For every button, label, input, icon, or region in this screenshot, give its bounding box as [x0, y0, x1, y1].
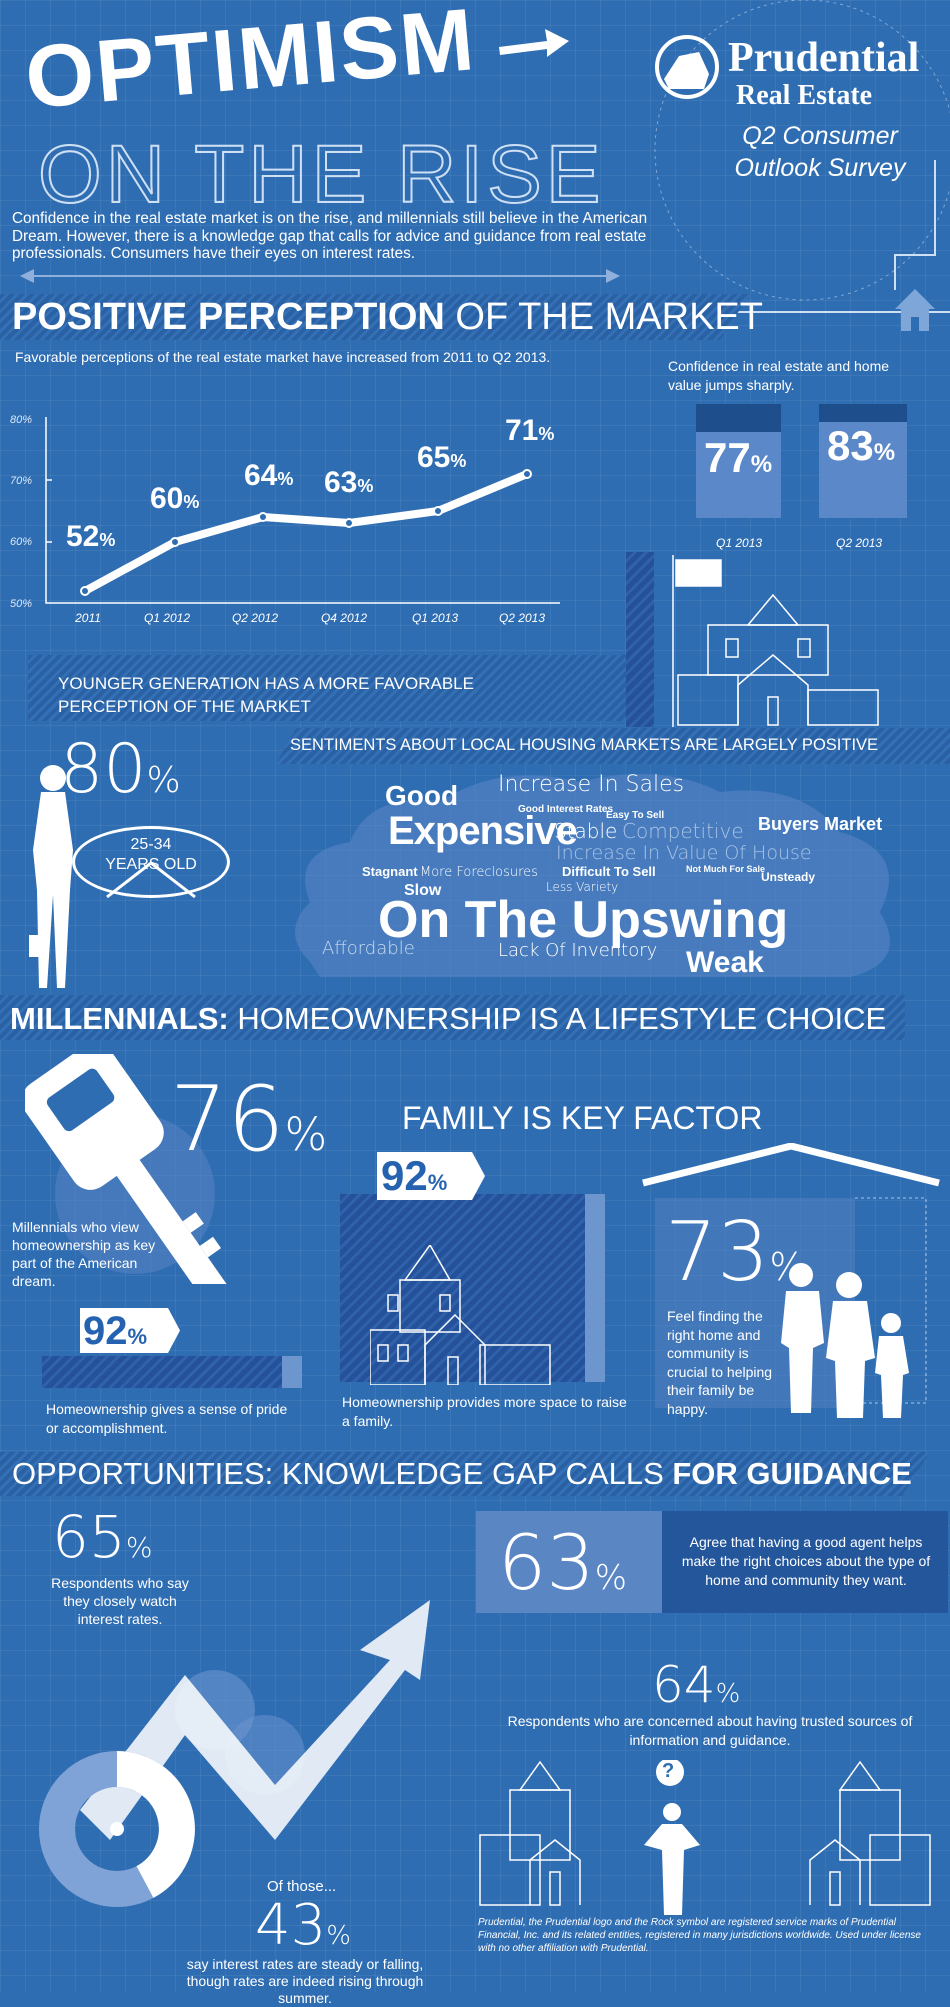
bar chart: confidence: Q2 2013 [836, 536, 882, 550]
word cloud: Increase In Sales [498, 772, 684, 797]
stat: 76%: 76% [170, 1067, 327, 1172]
text: trusted sources: Respondents who are concerned about having trusted sources of information and guidance. [508, 1713, 912, 1748]
ellipse: age: YEARS OLD [105, 856, 197, 873]
ellipse: age [72, 826, 230, 898]
panel: good agent [476, 1511, 948, 1613]
band: sentiments [276, 728, 950, 764]
line chart: 65% [417, 441, 466, 474]
logo: prudential: Prudential [728, 35, 919, 81]
line chart: 60% [150, 482, 199, 515]
panel: family home [642, 1143, 940, 1418]
word cloud: Increase In Value Of House [556, 842, 812, 864]
text: of those: Of those... [267, 1878, 336, 1895]
line chart: 80% [10, 414, 32, 426]
line chart: Q4 2012 [321, 611, 367, 625]
text: PERCEPTION OF THE MARKET [58, 697, 311, 716]
text: interest rates: Respondents who say they closely watch interest rates. [51, 1575, 189, 1627]
stat: 80%: 80% [60, 730, 181, 809]
line chart: 60% [10, 536, 32, 548]
panel: family home: Feel finding the right home and community is crucial to helping their family be happy. [667, 1308, 772, 1416]
line chart: 52% [66, 520, 115, 553]
word cloud: On The Upswing [378, 891, 788, 949]
word cloud: Easy To Sell [606, 810, 664, 821]
word cloud [295, 772, 890, 979]
stat: 92% family [377, 1152, 485, 1200]
word cloud: Unsteady [761, 870, 815, 884]
stat: 65%: 65% [52, 1503, 152, 1571]
word cloud: Good [385, 780, 458, 811]
text: pride: Homeownership gives a sense of pride or accomplishment. [46, 1401, 287, 1436]
word cloud: Not Much For Sale [686, 864, 765, 874]
line chart: 64% [244, 459, 293, 492]
bar chart: confidence [696, 404, 907, 550]
bar chart: confidence: 83% [827, 422, 895, 469]
text: rates steady: say interest rates are steady or falling, though rates are indeed rising through summer. [187, 1956, 423, 2006]
word cloud: Buyers Market [758, 814, 882, 834]
icon: key [25, 1054, 226, 1284]
icon: house with flag [672, 555, 879, 727]
word cloud: Good Interest Rates [518, 804, 613, 815]
word cloud: Lack Of Inventory [498, 940, 657, 961]
line chart: 71% [505, 414, 554, 447]
panel: family space [340, 1194, 585, 1382]
word cloud: Stable [554, 819, 617, 843]
word cloud: Difficult To Sell [562, 864, 656, 879]
text: OPPORTUNITIES: KNOWLEDGE GAP CALLS FOR GUIDANCE [12, 1456, 912, 1491]
icon: rock [655, 35, 719, 99]
bar chart: confidence: 77% [704, 434, 772, 481]
word cloud: Slow [404, 882, 441, 899]
panel: family home: 73% [665, 1205, 805, 1300]
bar chart: confidence: Q1 2013 [716, 536, 762, 550]
icon: small house [895, 289, 935, 331]
icon: woman silhouette [29, 765, 73, 988]
band: younger generation [28, 655, 628, 721]
line chart: Q1 2012 [144, 611, 190, 625]
stat: 43%: 43% [255, 1893, 351, 1958]
logo: prudential [655, 35, 919, 182]
line chart: 50% [10, 598, 32, 610]
logo: prudential: Real Estate [736, 80, 872, 111]
stat: 64%: 64% [652, 1656, 740, 1714]
heading: family: FAMILY IS KEY FACTOR [402, 1100, 762, 1136]
line chart: 2011 [74, 611, 101, 625]
text: confidence: Confidence in real estate and home value jumps sharply. [668, 358, 889, 393]
word cloud: Competitive [622, 819, 744, 843]
band: positive perception [0, 294, 750, 340]
stat: 92% family: 92% [381, 1152, 447, 1199]
chart: rising arrow and donut [39, 1600, 430, 1907]
word cloud: More Foreclosures [420, 865, 538, 880]
word cloud: Weak [686, 946, 764, 979]
line chart: 70% [10, 475, 32, 487]
intro text: Confidence in the real estate market is on the rise, and millennials still believe in the American Dream. However, there is a knowledge gap that calls for advice and guidance from real estate professionals. Consumers have their eyes on interest rates. [12, 210, 647, 262]
word cloud: Affordable [322, 938, 415, 959]
illustration: houses and person [479, 1760, 931, 1915]
panel: good agent: 63% [498, 1518, 627, 1607]
arrow: title arrow [499, 29, 569, 57]
stat: 92% pride [80, 1308, 180, 1353]
band: opportunities [0, 1452, 930, 1496]
footer: legal text: Prudential, the Prudential logo and the Rock symbol are registered service marks of Prudential Financial, Inc. and its related entities, registered in many jurisdictions worldwide. Used under license with no other affiliation with Prudential. [478, 1917, 921, 1954]
line chart: Q1 2013 [412, 611, 458, 625]
line chart [10, 414, 560, 625]
band: millennials [0, 995, 905, 1040]
text: more space: Homeownership provides more space to raise a family. [342, 1394, 627, 1429]
panel: good agent: Agree that having a good agent helps make the right choices about the type of home and community they want. [682, 1534, 930, 1588]
logo: prudential: Outlook Survey [735, 154, 905, 182]
word cloud: Less Variety [546, 880, 618, 894]
text: ? [662, 1760, 674, 1782]
line chart: Q2 2013 [499, 611, 545, 625]
word cloud: Expensive [388, 809, 577, 853]
stat: 92% pride: 92% [83, 1309, 147, 1353]
logo: prudential: Q2 Consumer [742, 122, 898, 150]
text: american dream: Millennials who view homeownership as key part of the American dream. [12, 1219, 155, 1289]
ellipse: age: 25-34 [131, 836, 171, 853]
text: SENTIMENTS ABOUT LOCAL HOUSING MARKETS ARE LARGELY POSITIVE [290, 736, 878, 754]
text: MILLENNIALS: HOMEOWNERSHIP IS A LIFESTYLE CHOICE [10, 1001, 886, 1036]
word cloud: Stagnant [362, 864, 418, 879]
text: YOUNGER GENERATION HAS A MORE FAVORABLE [58, 674, 474, 693]
line chart: Q2 2012 [232, 611, 278, 625]
subtitle: Favorable perceptions of the real estate market have increased from 2011 to Q2 2013. [15, 349, 550, 365]
line chart: 63% [324, 466, 373, 499]
text: POSITIVE PERCEPTION OF THE MARKET [12, 296, 763, 338]
